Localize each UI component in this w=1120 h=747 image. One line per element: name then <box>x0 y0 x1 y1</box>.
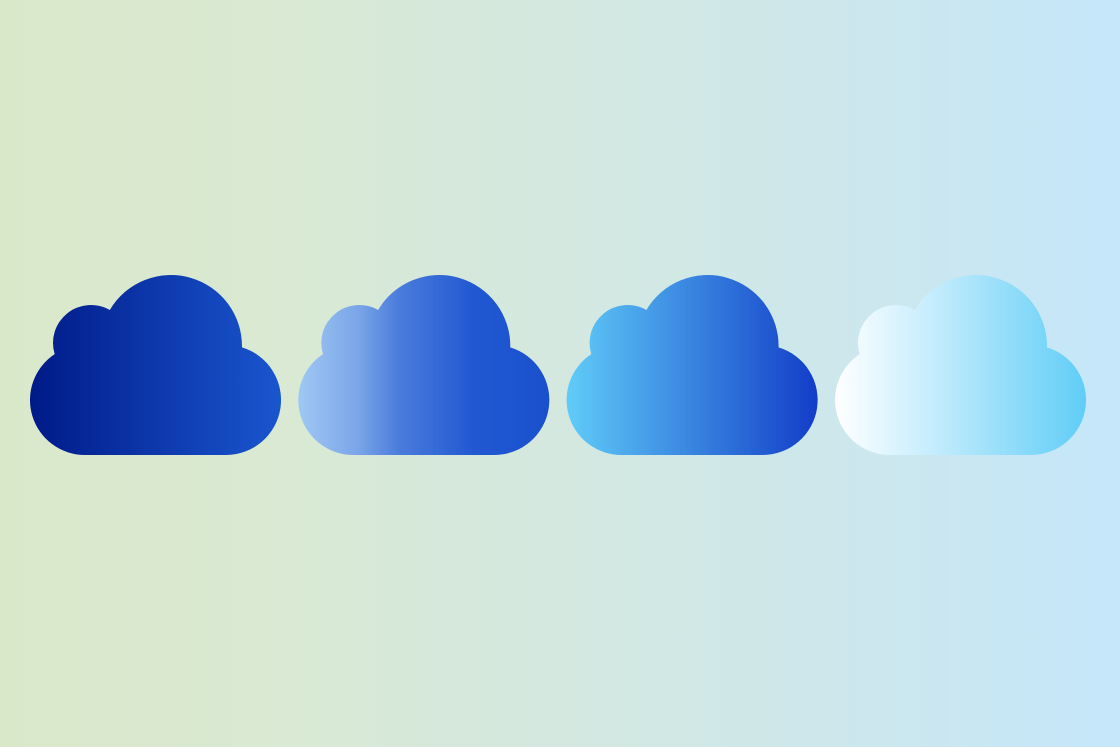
icon: white-to-cyan cloud <box>835 275 1086 455</box>
icon: cyan-to-blue cloud <box>567 275 818 455</box>
icon: pale-to-blue cloud <box>298 275 549 455</box>
icon: dark blue cloud <box>30 275 281 455</box>
